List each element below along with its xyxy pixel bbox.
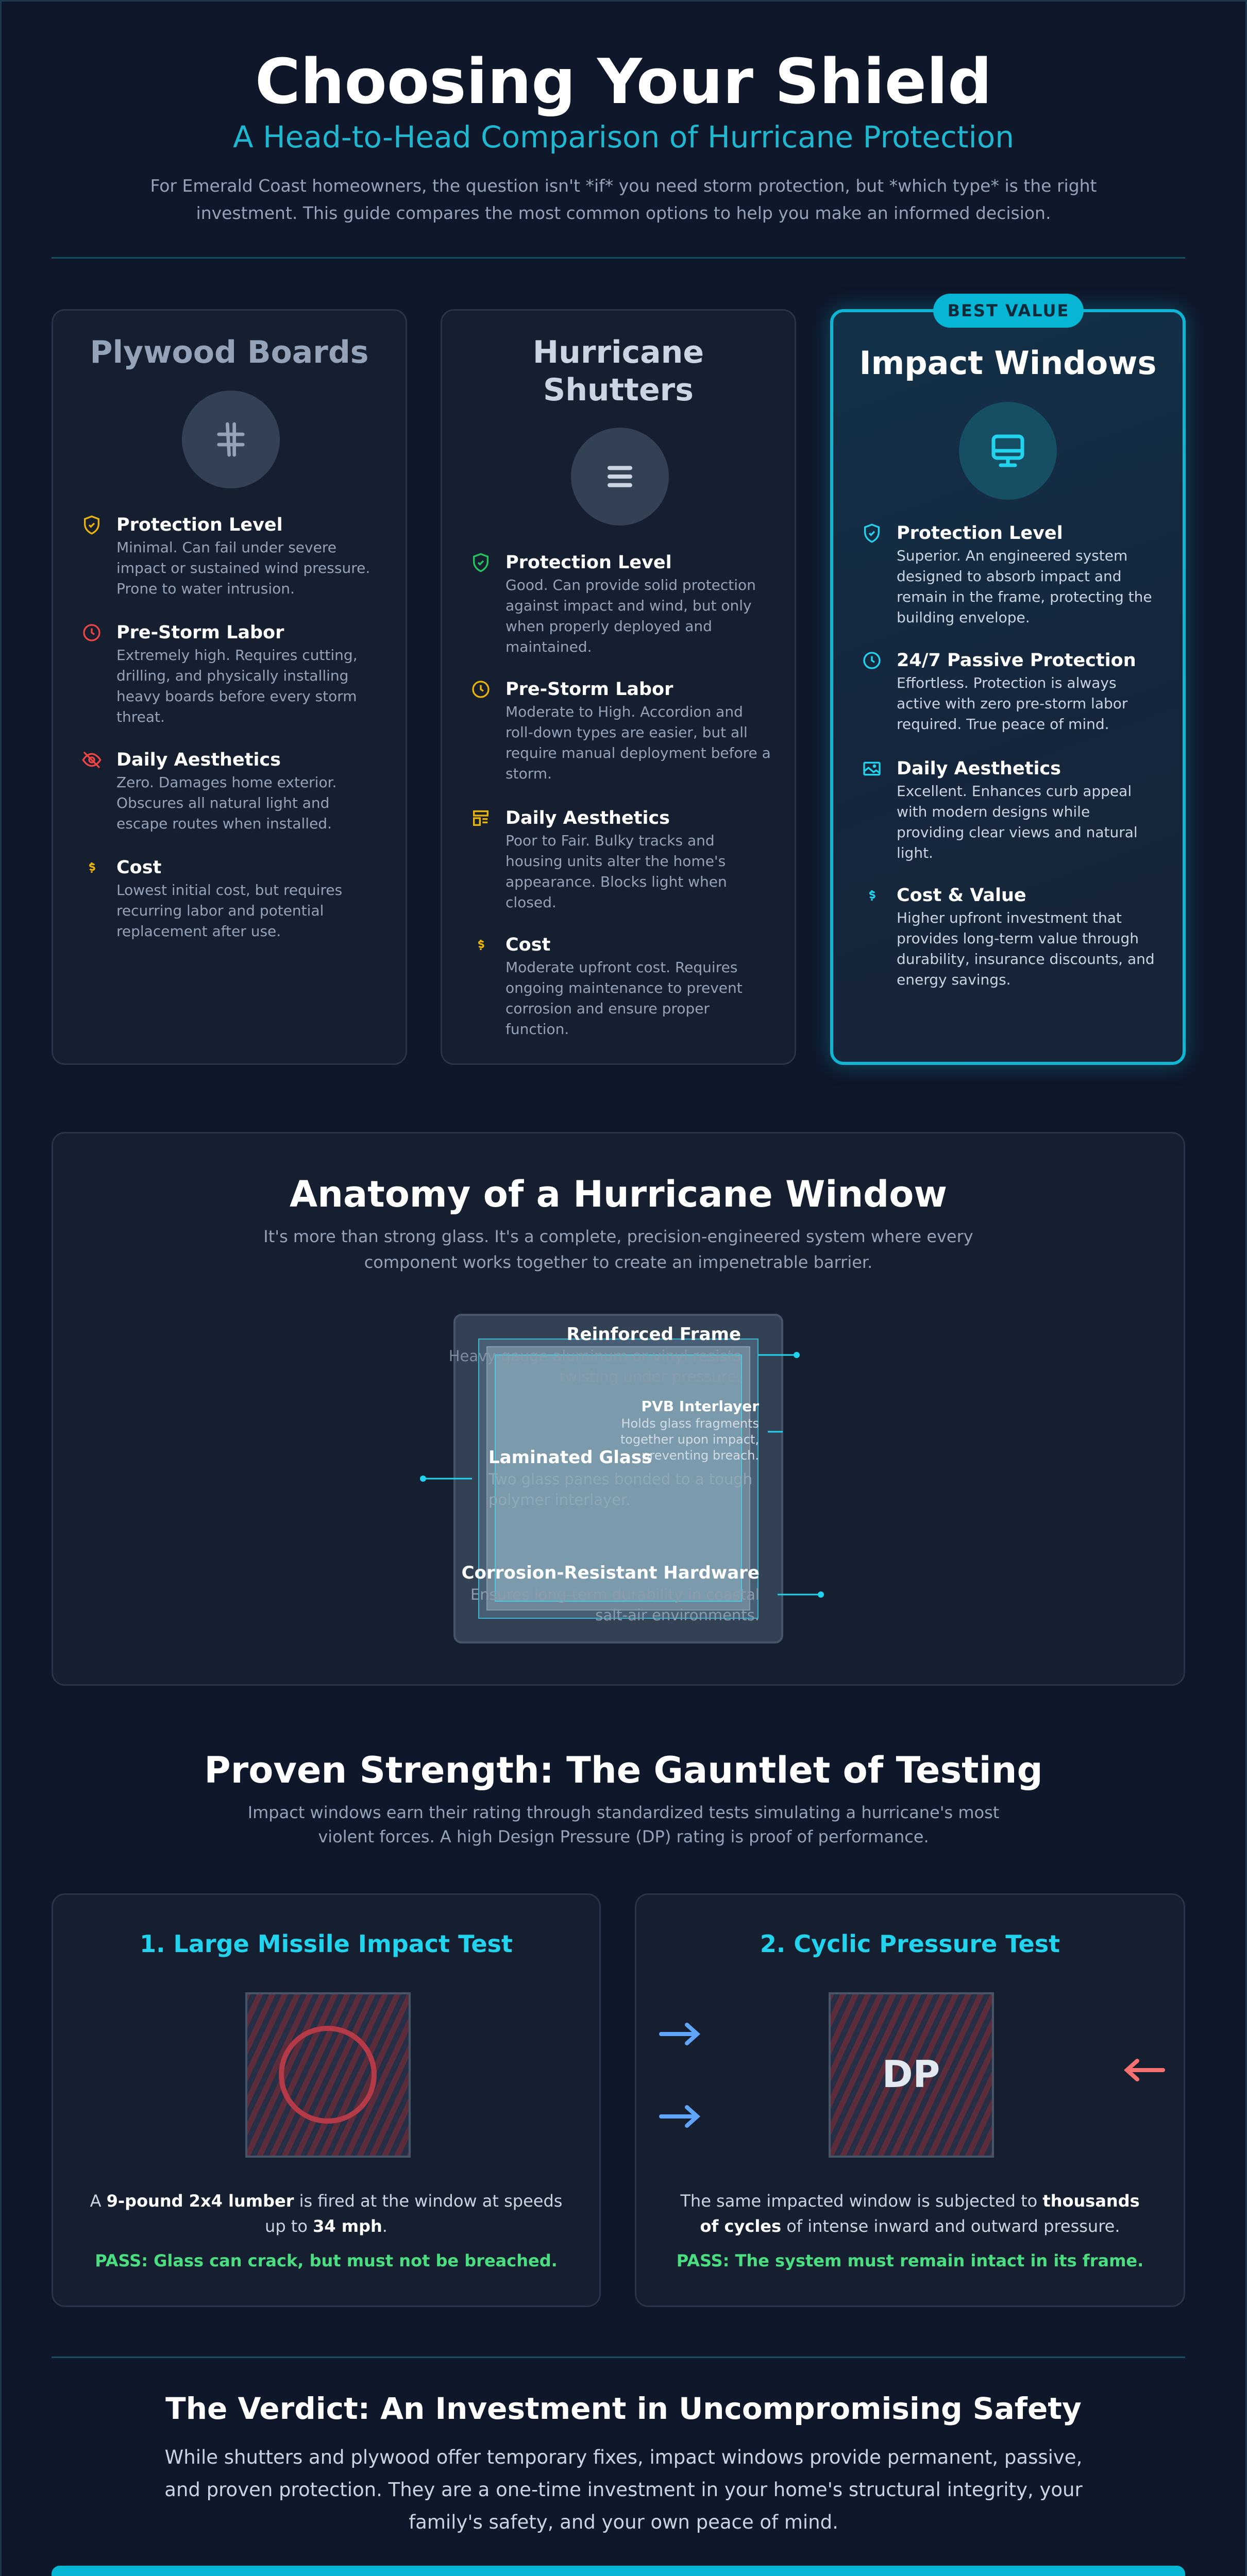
panel: hurricane shutters: Good. Can provide solid protection <box>505 577 756 594</box>
label: corrosion-resistant hardware: salt-air environments. <box>595 1606 760 1624</box>
panel: plywood boards: Protection Level <box>116 515 283 535</box>
item: pre-storm labor <box>472 679 771 782</box>
item: protection level <box>473 552 756 655</box>
label: reinforced frame: Reinforced Frame <box>566 1324 741 1345</box>
panel: plywood boards: recurring labor and potential <box>116 902 324 919</box>
anatomy title: Anatomy of a Hurricane Window <box>290 1173 947 1215</box>
panel: hurricane shutters: function. <box>505 1021 569 1038</box>
chart: DP window: DP <box>882 2053 940 2096</box>
panel: hurricane shutters: roll-down types are easier, but all <box>505 724 748 741</box>
label: laminated glass: polymer interlayer. <box>488 1491 631 1509</box>
arrow: outward <box>1124 2059 1165 2081</box>
panel: impact windows (best value): providing clear views and natural <box>897 824 1138 841</box>
pass 1: PASS: Glass can crack, but must not be breached. <box>95 2251 558 2270</box>
icon: hash <box>182 391 280 488</box>
panel: impact windows (best value): remain in the frame, protecting the <box>897 588 1152 605</box>
panel: plywood boards: heavy boards before every storm <box>116 688 357 705</box>
panel: plywood boards: Zero. Damages home exterior. <box>116 774 336 791</box>
test 2 description: The same impacted window is subjected to thousands <box>680 2191 1140 2211</box>
panel: hurricane shutters <box>441 309 796 1065</box>
label: pvb interlayer <box>620 1398 759 1463</box>
panel: plywood boards: threat. <box>116 708 165 725</box>
panel: hurricane shutters: against impact and wind, but only <box>505 597 752 614</box>
panel: hurricane shutters: when properly deployed and <box>505 618 712 635</box>
panel: hurricane shutters: Moderate to High. Accordion and <box>505 703 743 720</box>
panel: plywood boards: impact or sustained wind pressure. <box>116 560 370 577</box>
test 1 title: 1. Large Missile Impact Test <box>140 1930 513 1958</box>
verdict paragraph <box>164 2446 1083 2533</box>
panel: plywood boards: Pre-Storm Labor <box>116 622 284 643</box>
card title: shutters: Shutters <box>543 372 694 408</box>
panel: hurricane shutters: maintained. <box>505 638 592 655</box>
panel: hurricane shutters: storm. <box>505 765 552 782</box>
test 2 description <box>680 2191 1140 2236</box>
label: laminated glass: Two glass panes bonded to a tough <box>488 1470 752 1488</box>
panel: impact windows (best value): required. True peace of mind. <box>897 716 1109 733</box>
panel: impact windows (best value) <box>830 309 1186 1065</box>
card title: impact windows: Impact Windows <box>860 344 1156 382</box>
label: corrosion-resistant hardware: Corrosion-Resistant Hardware <box>462 1563 760 1583</box>
call to action button <box>52 2566 1185 2576</box>
panel: missile impact test <box>52 1893 601 2307</box>
verdict title: The Verdict: An Investment in Uncompromising Safety <box>165 2391 1082 2426</box>
item: daily aesthetics <box>82 750 336 832</box>
panel: plywood boards: escape routes when installed. <box>116 815 332 832</box>
test 1 description <box>90 2191 562 2236</box>
panel: plywood boards: Extremely high. Requires cutting, <box>116 647 358 664</box>
verdict paragraph: and proven protection. They are a one-time investment in your home's structural integrity, your <box>164 2479 1083 2501</box>
panel: impact windows (best value): active with zero pre-storm labor <box>897 695 1127 712</box>
label: reinforced frame: Heavy-gauge aluminum or vinyl resists <box>449 1347 741 1365</box>
panel: hurricane shutters: Pre-Storm Labor <box>505 679 673 700</box>
panel: impact windows (best value): Effortless. Protection is always <box>897 674 1117 691</box>
panel: impact windows (best value): Protection Level <box>897 523 1063 544</box>
test 1 description: A 9-pound 2x4 lumber is fired at the window at speeds <box>90 2191 562 2211</box>
panel: plywood boards: Minimal. Can fail under severe <box>116 539 336 556</box>
item: 24/7 passive <box>863 650 1136 733</box>
arrows: inward <box>659 2023 700 2128</box>
panel: plywood boards: drilling, and physically installing <box>116 667 348 684</box>
card title: plywood: Plywood Boards <box>90 334 369 370</box>
label: laminated glass <box>488 1447 752 1509</box>
panel: hurricane shutters: Daily Aesthetics <box>505 808 670 828</box>
intro paragraph <box>150 176 1097 223</box>
test 2 description: of cycles of intense inward and outward pressure. <box>700 2216 1120 2236</box>
panel: impact windows (best value): Excellent. Enhances curb appeal <box>897 783 1132 800</box>
badge: best value <box>933 294 1084 328</box>
label: pvb interlayer: Holds glass fragments <box>621 1416 759 1431</box>
panel: impact windows (best value): Cost & Value <box>897 885 1026 906</box>
anatomy subtitle: component works together to create an impenetrable barrier. <box>364 1252 872 1272</box>
intro paragraph: investment. This guide compares the most common options to help you make an informed decision. <box>196 203 1051 223</box>
panel: impact windows (best value): energy savings. <box>897 971 1011 988</box>
label: pvb interlayer: preventing breach. <box>642 1448 759 1463</box>
panel: impact windows (best value): 24/7 Passive Protection <box>897 650 1136 671</box>
panel: anatomy <box>52 1132 1185 1686</box>
item: daily aesthetics <box>473 808 727 911</box>
panel: impact windows (best value): with modern designs while <box>897 803 1090 820</box>
panel: impact windows (best value): Daily Aesthetics <box>897 758 1061 779</box>
badge: best value: BEST VALUE <box>948 301 1069 320</box>
panel: hurricane shutters: housing units alter the home's <box>505 853 726 870</box>
panel: hurricane shutters: require manual deployment before a <box>505 744 771 761</box>
panel: hurricane shutters: closed. <box>505 894 557 911</box>
testing subtitle: Impact windows earn their rating through standardized tests simulating a hurricane's most <box>248 1803 999 1822</box>
verdict paragraph: While shutters and plywood offer temporary fixes, impact windows provide permanent, passive, <box>165 2446 1082 2468</box>
panel: plywood boards: Obscures all natural light and <box>116 794 329 811</box>
anatomy subtitle <box>263 1227 973 1272</box>
panel: hurricane shutters: Moderate upfront cost. Requires <box>505 959 737 976</box>
label: reinforced frame <box>449 1324 741 1385</box>
panel: hurricane shutters: Protection Level <box>505 552 672 573</box>
panel: hurricane shutters: appearance. Blocks light when <box>505 873 727 890</box>
test 1 description: up to 34 mph. <box>265 2216 387 2236</box>
label: pvb interlayer: PVB Interlayer <box>641 1398 759 1415</box>
panel: impact windows (best value): Superior. An engineered system <box>897 547 1127 564</box>
diagram: window anatomy <box>420 1314 824 1643</box>
card title: shutters <box>533 334 704 408</box>
pass 2: PASS: The system must remain intact in its frame. <box>677 2251 1143 2270</box>
panel: impact windows (best value): Higher upfront investment that <box>897 909 1122 926</box>
panel: hurricane shutters: ongoing maintenance to prevent <box>505 979 743 996</box>
panel: plywood boards <box>52 309 407 1065</box>
item: cost & value <box>869 885 1155 988</box>
chart: DP window <box>829 1992 994 2158</box>
verdict paragraph: family's safety, and your own peace of mind. <box>409 2511 838 2533</box>
item: cost <box>478 935 743 1038</box>
panel: plywood boards: Daily Aesthetics <box>116 750 281 770</box>
icon: monitor <box>959 402 1057 500</box>
label: corrosion-resistant hardware <box>462 1563 760 1624</box>
label: reinforced frame: twisting under pressure. <box>560 1368 741 1385</box>
item: protection level <box>864 523 1152 626</box>
anatomy subtitle: It's more than strong glass. It's a complete, precision-engineered system where every <box>263 1227 973 1246</box>
intro paragraph: For Emerald Coast homeowners, the question isn't *if* you need storm protection, but *which type* is the right <box>150 176 1097 196</box>
item: cost <box>89 857 342 940</box>
subtitle: A Head-to-Head Comparison of Hurricane Protection <box>233 120 1014 155</box>
panel: plywood boards: Lowest initial cost, but requires <box>116 882 342 899</box>
panel: impact windows (best value): building envelope. <box>897 609 1030 626</box>
card title: shutters: Hurricane <box>533 334 704 370</box>
panel: plywood boards: Cost <box>116 857 161 878</box>
label: laminated glass: Laminated Glass <box>488 1447 652 1468</box>
icon: bars <box>571 428 669 526</box>
label: pvb interlayer: together upon impact, <box>620 1432 759 1447</box>
panel: hurricane shutters: Poor to Fair. Bulky tracks and <box>505 832 715 849</box>
item: protection level <box>84 515 370 597</box>
panel: impact windows (best value): durability, insurance discounts, and <box>897 951 1155 968</box>
title: Choosing Your Shield <box>255 46 992 118</box>
panel: cyclic pressure test <box>635 1893 1185 2307</box>
test 2 title: 2. Cyclic Pressure Test <box>760 1930 1060 1958</box>
item: pre-storm labor <box>83 622 358 725</box>
panel: impact windows (best value): provides long-term value through <box>897 930 1139 947</box>
testing subtitle: violent forces. A high Design Pressure (DP) rating is proof of performance. <box>318 1827 929 1846</box>
panel: plywood boards: Prone to water intrusion. <box>116 580 295 597</box>
panel: hurricane shutters: corrosion and ensure proper <box>505 1000 710 1017</box>
item: daily aesthetics <box>863 758 1138 861</box>
panel: impact windows (best value): designed to absorb impact and <box>897 568 1122 585</box>
chart: impact window <box>245 1992 411 2158</box>
label: corrosion-resistant hardware: Ensures long-term durability in coastal <box>470 1586 760 1603</box>
panel: hurricane shutters: Cost <box>505 935 550 955</box>
testing heading: Proven Strength: The Gauntlet of Testing <box>204 1749 1043 1791</box>
panel: plywood boards: replacement after use. <box>116 923 281 940</box>
panel: impact windows (best value): light. <box>897 844 933 861</box>
testing subtitle <box>248 1803 999 1846</box>
